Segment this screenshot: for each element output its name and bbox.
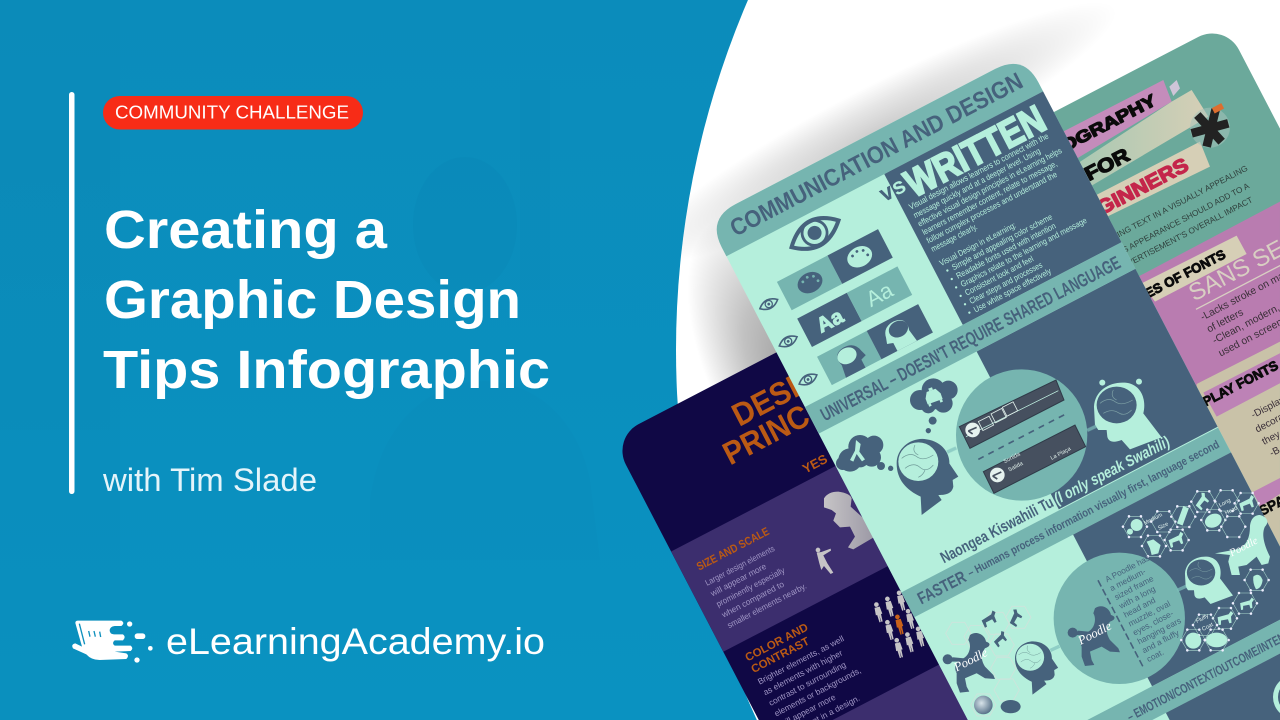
faster: mint poodle: Poodle (1227, 535, 1260, 560)
poodle description: head and (1122, 595, 1157, 620)
intro paragraph: Visual design allows learners to connect with the (907, 131, 1050, 212)
section: size and scale (694, 522, 808, 631)
intro paragraph: message clearly. (929, 221, 979, 254)
intro paragraph: Clear steps and processes (967, 260, 1044, 306)
intro paragraph: learners remember content, relate to message, (920, 158, 1059, 237)
heading text: typography for beginners: BEGINNERS (1066, 154, 1192, 234)
network labels: Long (1218, 498, 1232, 509)
connector glows (946, 425, 1187, 652)
title: Graphic Design (104, 270, 521, 330)
band: faster: – Humans process information visually first, language second (966, 439, 1222, 580)
intro paragraph: • (944, 265, 951, 275)
heading text: typography for beginners (1022, 91, 1192, 234)
poodle description: coat. (1145, 647, 1165, 664)
language line: (I only speak Swahili) (1051, 434, 1173, 508)
card: communication and design (front) (707, 54, 1280, 720)
card base with sections (612, 244, 1271, 720)
icon: person small (816, 548, 833, 574)
universal: airport signs: Salida (1007, 460, 1025, 473)
faster: left honeycomb (946, 606, 1031, 716)
intro paragraph: • (966, 307, 973, 318)
poodle description: eyes, close- (1131, 608, 1175, 637)
faster: circle (1054, 553, 1185, 684)
intro paragraph: • (948, 274, 955, 284)
types of fonts heading: TYPES OF FONTS (1119, 247, 1228, 313)
faster: network icons (1127, 491, 1263, 649)
title: Tips Infographic (103, 340, 550, 400)
section: color and contrast: elements or backgrounds, (773, 665, 863, 718)
faster: mint poodle (1215, 515, 1270, 575)
icon: large eye (785, 209, 845, 257)
card base (888, 23, 1280, 720)
faster: small animals (980, 608, 1024, 647)
heading: vs written: WRITTEN (898, 98, 1053, 206)
badge: community challenge (103, 96, 363, 130)
intro paragraph: • (957, 290, 964, 301)
section panels (1107, 202, 1280, 630)
intro paragraph: effective visual design principles in eLearning helps (916, 145, 1063, 228)
network labels: Coat (1201, 622, 1215, 633)
intro paragraph: Consistent look and feel (963, 253, 1035, 297)
poodle description: sized frame (1113, 573, 1156, 602)
pictograms layer (836, 369, 1270, 716)
faster: left poodle: Poodle (951, 645, 990, 675)
icons: small eyes (758, 295, 819, 388)
intro paragraph: message quickly and at a deeper level. Using (912, 145, 1042, 220)
poodle description: a medium- (1108, 566, 1147, 593)
icons: scale and contrast figures (816, 492, 926, 658)
white circular backdrop (676, 0, 1280, 720)
poodle description: A Poodle has (1103, 553, 1151, 584)
universal: taxi cloud (910, 378, 958, 433)
text overlays in card rotation (938, 434, 1256, 720)
section: color and contrast: Brighter elements, as well (756, 633, 846, 686)
row: brain tiles (817, 304, 933, 385)
heading: vs written: s (887, 171, 910, 200)
left vertical accent bar (69, 92, 74, 494)
section: size and scale: when compared to (719, 579, 786, 620)
intro paragraph: Simple and appealing color scheme (950, 211, 1054, 272)
row: palette tiles (777, 229, 893, 310)
intro text: USING TEXT IN A VISUALLY APPEALING (1105, 163, 1249, 245)
sans serif: of letters (1205, 307, 1246, 335)
band: universal: UNIVERSAL – DOESN'T REQUIRE SHARED LANGUAGE (817, 252, 1124, 425)
row: type tiles (797, 266, 912, 347)
intro paragraph: Use white space effectively (972, 265, 1053, 314)
sans serif (1184, 217, 1280, 359)
section: size and scale: will appear more (708, 561, 768, 599)
section: color and contrast: CONTRAST (749, 636, 812, 676)
universal: airport signs (959, 380, 1086, 493)
spacing band (1253, 478, 1280, 526)
heading text: typography for beginners: TYPOGRAPHY (1022, 91, 1159, 174)
intro text: ADVERTISEMENT'S OVERALL IMPACT (1115, 195, 1254, 273)
row: type tiles: Aa (813, 305, 848, 338)
faster: middle poodle: Poodle (1075, 618, 1114, 648)
icon grid: color, type, imagery (777, 229, 933, 386)
badge: community challenge: COMMUNITY CHALLENGE (115, 102, 349, 122)
column label: yes: YES (800, 451, 830, 476)
universal: left thought cloud (836, 435, 893, 472)
faster: left poodle (943, 633, 995, 693)
row: type tiles: Aa (862, 277, 898, 312)
universal: sign circle (956, 369, 1087, 501)
poodle description: and a fluffy (1140, 627, 1181, 655)
section: size and scale: prominently especially (714, 565, 787, 609)
band: faster: FASTER (914, 567, 969, 608)
heading ribbons (1053, 80, 1210, 227)
intro paragraph: follow complex processes and understand the (925, 169, 1059, 245)
icon: crowd with highlighted person (873, 590, 926, 658)
faster: hex network (1122, 489, 1270, 652)
universal: airport signs: La Plaça (1050, 446, 1073, 462)
icon: asterisk (1190, 103, 1230, 148)
intro paragraph: Graphics relate to the learning and message (959, 215, 1089, 289)
heading: vs written: v (875, 178, 898, 207)
intro paragraph: • (952, 282, 960, 292)
title: Creating a (104, 200, 388, 260)
logo: eLearningAcademy.io: eLearningAcademy.io (166, 621, 545, 662)
section: size and scale: smaller elements nearby. (725, 581, 808, 630)
intro paragraph: • (961, 299, 969, 309)
display fonts heading: PLAY FONTS (1200, 358, 1280, 409)
card: design principles (back left) (612, 244, 1271, 720)
network labels: Fluffy (1195, 613, 1210, 625)
icon: bottom right head (1273, 675, 1280, 719)
network labels: Medium (1143, 512, 1164, 527)
presenter line: with Tim Slade (102, 462, 317, 498)
heading: design principles: DESIGN (726, 348, 845, 433)
heading text: typography for beginners: FOR (1082, 145, 1133, 186)
intro paragraph: Visual Design in eLearning: (938, 220, 1018, 268)
section: color and contrast: as elements with higher (761, 648, 844, 697)
faster: sphere and cloud (974, 696, 1021, 714)
title (103, 200, 550, 400)
intro paragraph (907, 128, 1110, 319)
lower display text (1250, 395, 1280, 459)
section: color and contrast (743, 609, 874, 720)
heading: vs written (873, 98, 1053, 219)
poodle description: muzzle, oval (1126, 598, 1172, 628)
intro text: ITS APPEARANCE SHOULD ADD TO A (1114, 180, 1251, 258)
section: size and scale: SIZE AND SCALE (695, 526, 772, 573)
network labels (1143, 498, 1239, 633)
band: faster (914, 435, 1223, 608)
section: size and scale: Larger design elements (703, 543, 776, 588)
card: typography for beginners (back right) (888, 23, 1280, 720)
language line (938, 434, 1173, 567)
universal: right head (1094, 379, 1162, 449)
faster: middle poodle (1068, 606, 1120, 666)
poodle description: with a long (1116, 583, 1157, 611)
icon: dinosaur (824, 492, 875, 549)
poodle description (1102, 553, 1193, 664)
language line: Naongea Kiswahili Tu (938, 494, 1057, 567)
intro paragraph: Readable fonts used with intention (954, 220, 1058, 281)
section: color and contrast: COLOR AND (743, 622, 810, 664)
poodle description ticks (1098, 580, 1143, 666)
icon: hand with speed lines (72, 621, 153, 663)
faster: right head (1185, 557, 1233, 604)
network labels: Head (1224, 505, 1239, 517)
header: communication and design: COMMUNICATION AND DESIGN (726, 68, 1027, 242)
heading: design principles: PRINCIPLES (717, 358, 891, 472)
network labels: Size (1157, 521, 1170, 532)
faster: left head (1015, 641, 1058, 695)
poodle description: hanging ears (1136, 615, 1183, 646)
universal: airport signs: Sortida (1003, 451, 1022, 465)
universal: left head (897, 439, 958, 515)
card shadows on the white backdrop (682, 22, 1081, 384)
card base and panels (707, 54, 1280, 720)
section: color and contrast: contrast to surrounding (767, 659, 848, 708)
